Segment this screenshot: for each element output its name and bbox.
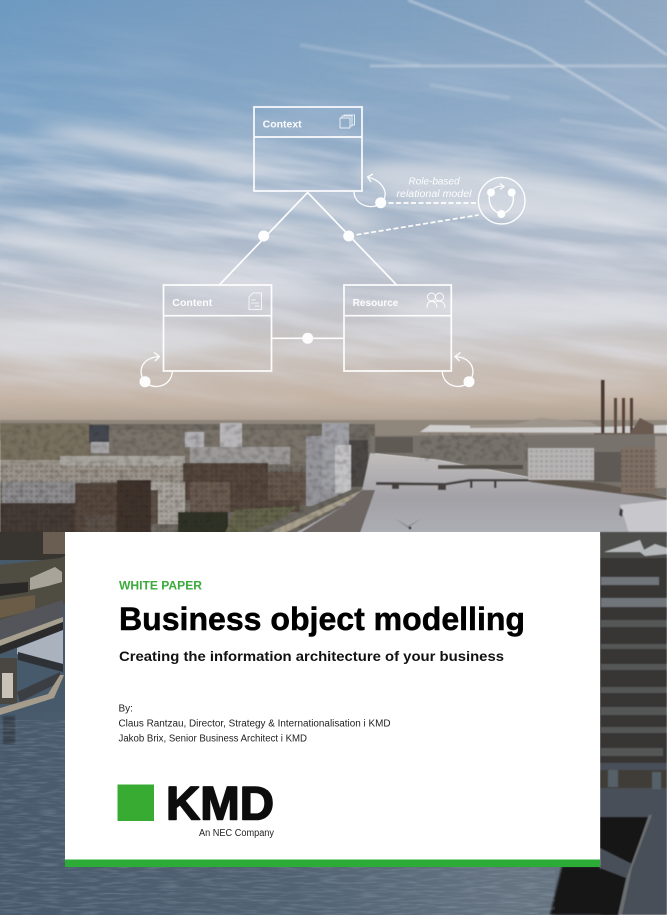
background photo: left strip waterfront <box>0 532 65 744</box>
background photo: water ripples and dark reflection <box>0 720 620 915</box>
authors <box>118 704 390 744</box>
box title: resource: Resource <box>353 298 399 309</box>
box: resource <box>344 285 451 371</box>
self loop: content <box>141 352 172 386</box>
background photo: sky <box>0 0 667 425</box>
caption: role-based relational model <box>396 176 472 200</box>
connector: triangle lines <box>219 192 397 285</box>
connector: content to resource <box>272 337 344 339</box>
caption: role-based relational model: Role-based <box>408 176 460 188</box>
background photo: right bank buildings <box>420 433 667 493</box>
background photo: right strip building <box>600 532 667 915</box>
KMD logo <box>118 776 274 839</box>
box title: content: Content <box>172 298 213 309</box>
icon: people <box>427 293 445 308</box>
title: Business object modelling <box>119 601 525 637</box>
caption: role-based relational model: relational model <box>396 189 472 200</box>
background photo: far shore and chimneys <box>0 380 667 445</box>
authors: Claus Rantzau, Director, Strategy & Internationalisation i KMD <box>118 718 390 730</box>
box: content <box>164 285 272 371</box>
box title: context: Context <box>263 120 302 130</box>
label: white paper: WHITE PAPER <box>119 580 203 592</box>
connector dots <box>140 197 474 387</box>
authors: By: <box>118 704 133 714</box>
background photo: bottom water <box>0 700 600 915</box>
logo: wordmark: KMD <box>166 776 274 830</box>
role-based relational model icon <box>478 177 525 224</box>
icon: folders <box>340 115 354 128</box>
background photo: right bank <box>370 434 667 497</box>
authors: Jakob Brix, Senior Business Architect i KMD <box>118 734 307 744</box>
dashed link: relation to role model <box>349 215 478 236</box>
dashed link: self relation to role model <box>381 202 478 204</box>
icon: document <box>249 293 262 310</box>
diagram: business object model <box>140 107 525 387</box>
self loop: context <box>354 174 385 207</box>
logo: tagline: An NEC Company <box>199 828 274 839</box>
background photo: river and bridge <box>290 453 667 536</box>
white title panel <box>65 532 600 867</box>
box: context <box>254 107 362 191</box>
self loop: resource <box>442 352 473 386</box>
subtitle: Creating the information architecture of your business <box>119 648 504 664</box>
background photo: city left bank <box>0 423 375 536</box>
green footer bar <box>65 860 600 867</box>
logo: green square <box>118 784 154 821</box>
